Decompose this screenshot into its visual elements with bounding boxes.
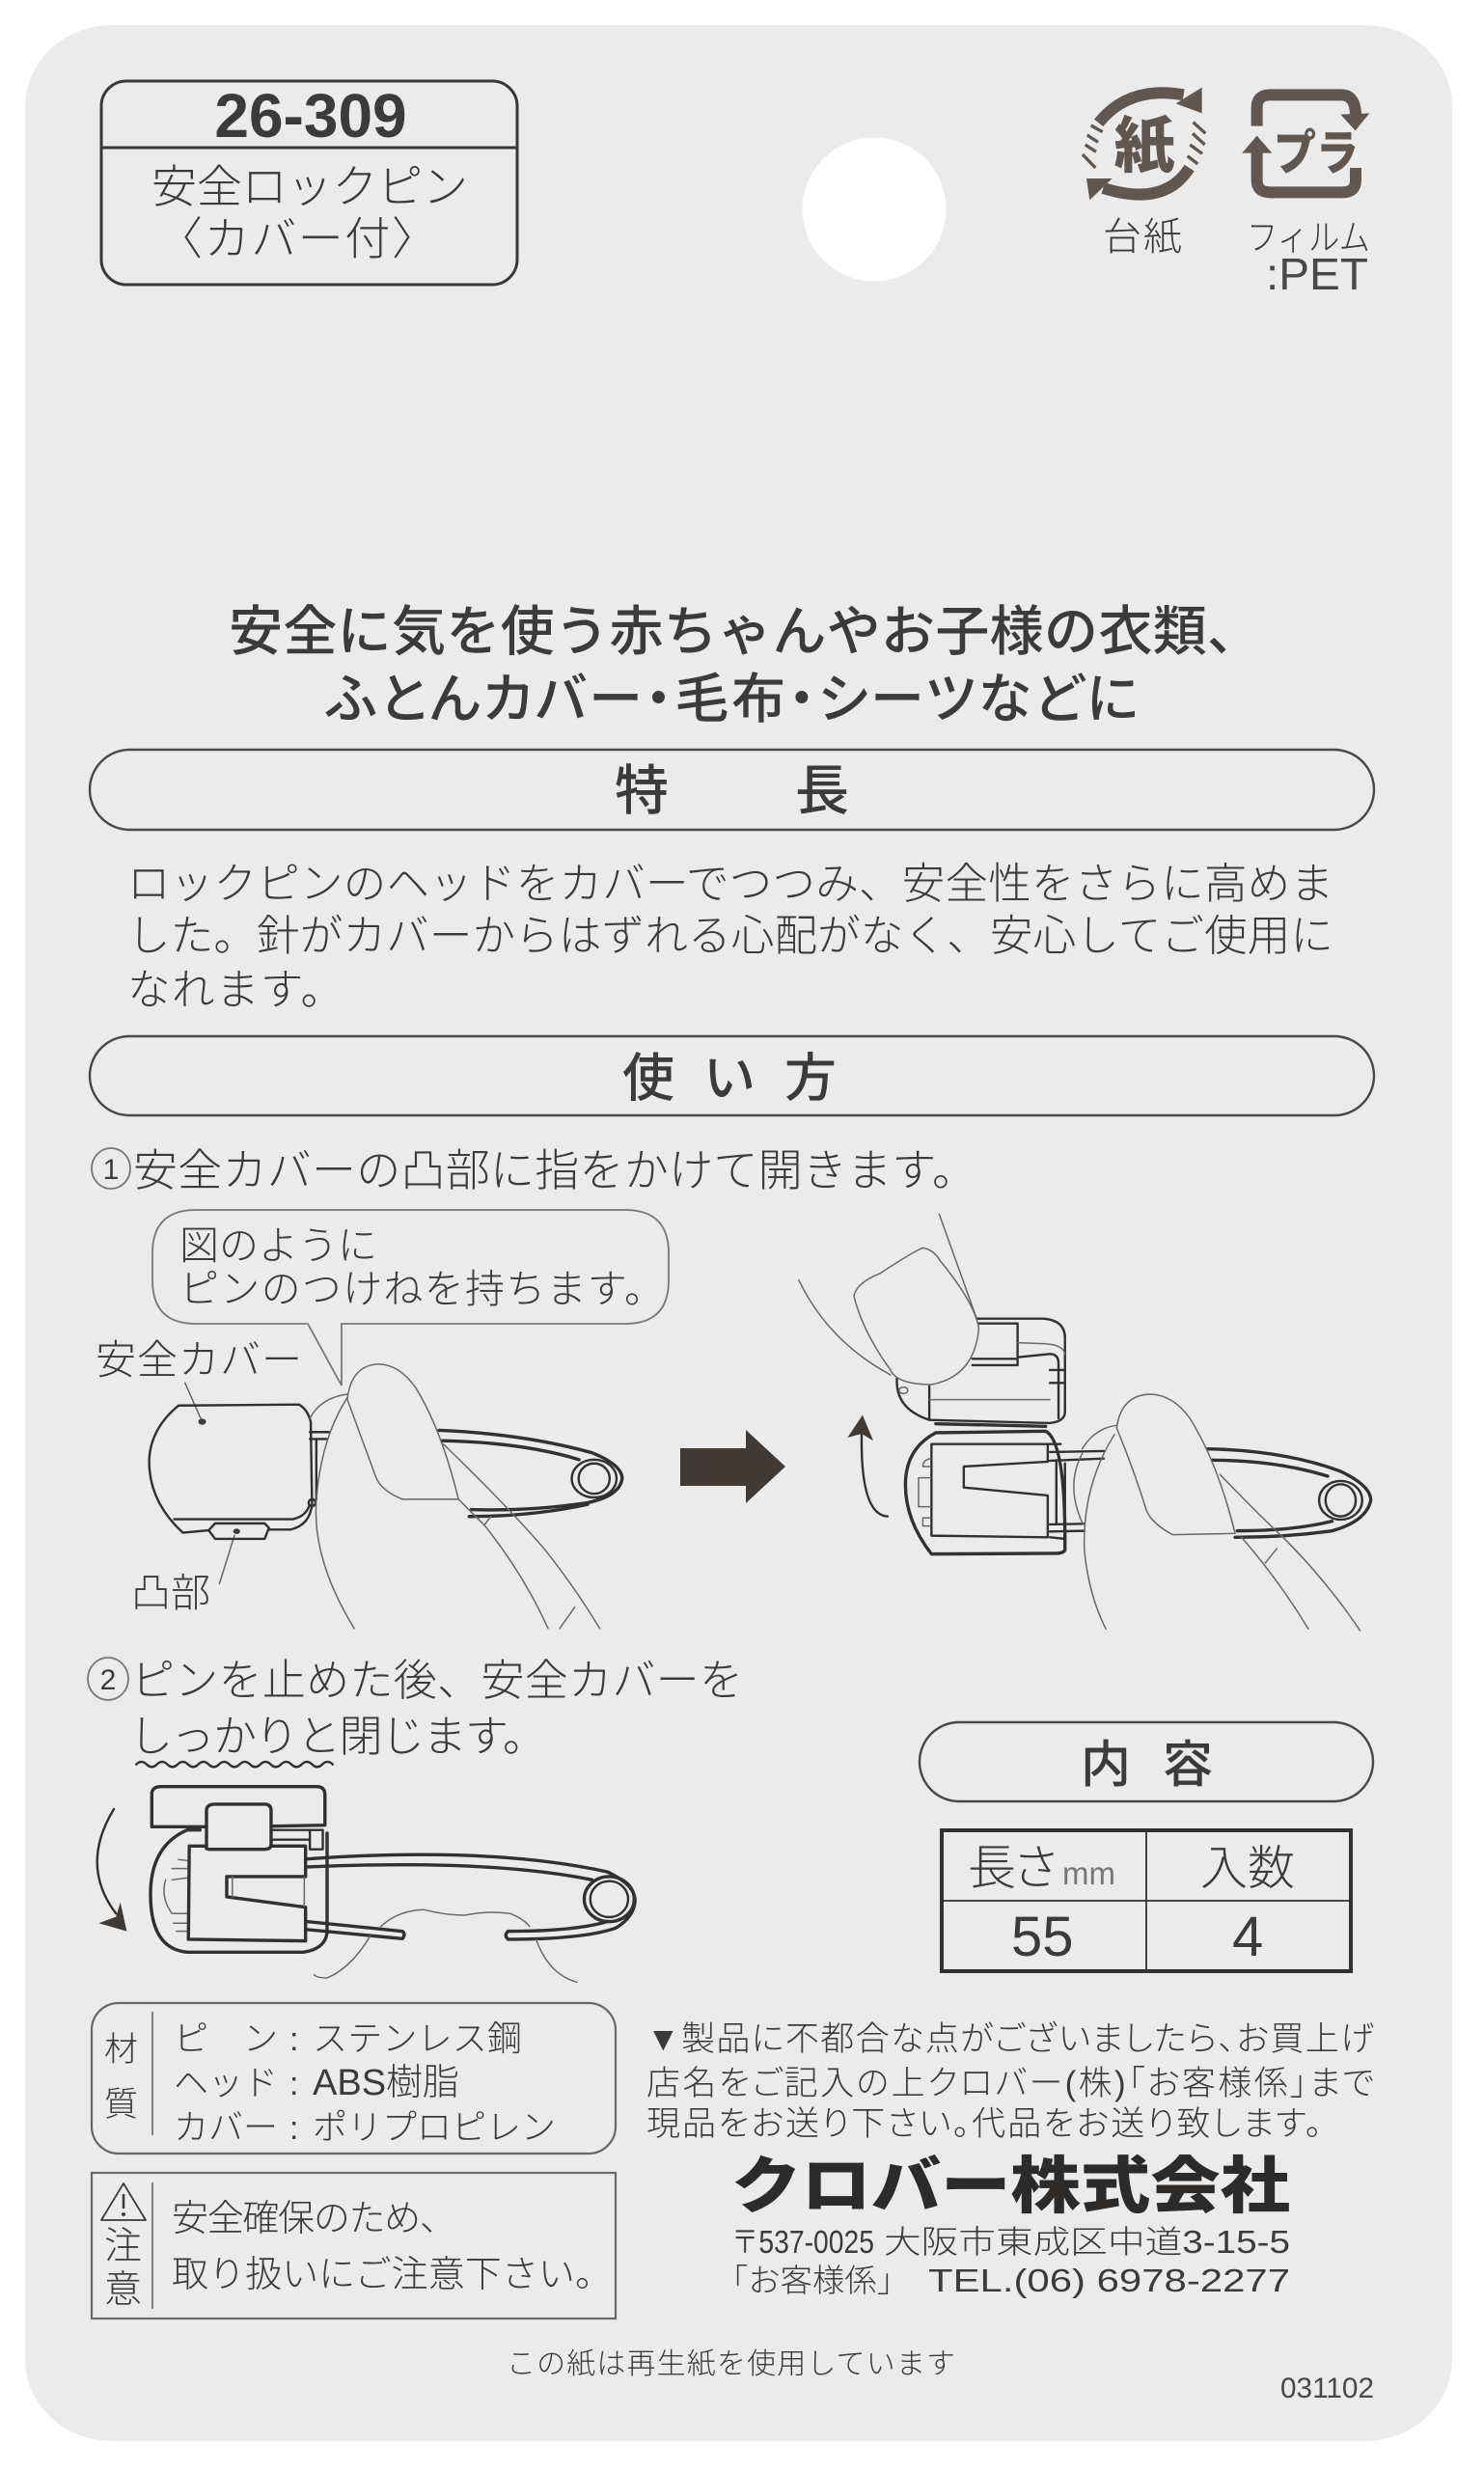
section heading: 使い方: 方 [784,1050,837,1108]
company address: 「お客様係」 [716,2263,909,2298]
contents table [942,1830,1351,1971]
headline: ふとんカバー・毛布・シーツなどに [325,669,1139,729]
company address: TEL.(06) 6978-2277 [928,2263,1290,2298]
contents table: mm [1062,1855,1115,1891]
contents table: 長さ [968,1841,1060,1895]
product number box [101,81,517,285]
icon: plastic recycling mark: フィルム [1247,218,1370,258]
callout: how to hold the pin [152,1210,669,1386]
features paragraph: した。針がカバーからはずれる心配がなく、安心してご使用に [127,913,1333,960]
illustration: holding the pin with the cover closed [150,1364,622,1629]
label: 凸部: 凸部 [131,1571,210,1615]
section heading: 使い方: い [703,1050,756,1108]
callout: how to hold the pin: ピンのつけねを持ちます。 [179,1267,664,1311]
callout: how to hold the pin: 図のように [179,1223,377,1268]
company address: 大阪市東成区中道3-15-5 [884,2224,1290,2260]
notice: defective product returns: ▼製品に不都合な点がございましたら、お買上げ [646,2020,1374,2058]
icon: plastic recycling mark: :PET [1266,249,1368,299]
panel: caution: 安全確保のため、 [172,2199,456,2239]
icon: plastic recycling mark: プラ [1274,126,1359,180]
features paragraph [127,861,1333,1014]
icon: paper recycling mark [1083,88,1205,259]
icon: paper recycling mark: 紙 [1113,113,1175,180]
headline: 安全に気を使う赤ちゃんやお子様の衣類、 [229,601,1261,662]
panel: materials: ABS樹脂 [313,2063,459,2103]
panel: materials: 材 [104,2031,138,2069]
notice: defective product returns: 現品をお送り下さい。代品をお送り致します。 [646,2105,1322,2143]
section heading: 内容 [920,1722,1373,1801]
recycled paper note: この紙は再生紙を使用しています [507,2348,955,2380]
panel: materials: ヘッド [174,2063,278,2102]
print code: 031102 [1280,2373,1374,2404]
company address: 〒537-0025 [731,2224,874,2260]
features paragraph: なれます。 [127,967,344,1014]
product number box: 〈カバー付〉 [157,213,437,264]
panel: caution: 取り扱いにご注意下さい。 [172,2255,612,2295]
section heading: 特長: 長 [795,760,849,821]
company address [716,2224,1290,2298]
step 1 instruction: 1 [103,1154,119,1186]
panel: materials: 質 [104,2086,138,2124]
section heading: 特長 [90,750,1374,830]
panel: materials: : [289,2110,298,2147]
contents table: 入数 [1200,1843,1295,1895]
panel: materials: ピ [174,2018,208,2058]
section heading: 使い方 [90,1036,1374,1115]
product number box: 26-309 [214,81,407,151]
company logo: クロバー株式会社 [731,2152,1290,2221]
product number box: 安全ロックピン [151,161,468,212]
illustration: closing the safety cover [97,1787,635,1982]
panel: materials: : [289,2066,298,2102]
notice: defective product returns: 店名をご記入の上クロバー(株)「お客様係」まで [646,2065,1374,2102]
step 2 instruction: ピンを止めた後、安全カバーを [131,1656,743,1705]
features paragraph: ロックピンのヘッドをカバーでつつみ、安全性をさらに高めま [127,861,1333,908]
contents table: 55 [1011,1906,1074,1968]
panel: materials [92,2003,616,2154]
panel: materials: カバー [174,2107,278,2147]
panel: materials: ステンレス鋼 [313,2018,522,2058]
step 1 instruction: 安全カバーの凸部に指をかけて開きます。 [133,1145,976,1195]
panel: caution: 注 [104,2226,142,2267]
icon: plastic recycling mark [1242,95,1370,299]
section heading: 特長: 特 [615,760,669,821]
step 2 instruction [88,1656,743,1767]
panel: caution: 意 [104,2269,142,2311]
arrow: next step [680,1430,785,1503]
panel: materials: ポリプロピレン [313,2107,556,2147]
step 2 instruction: 2 [100,1664,116,1696]
step 2 instruction: しっかりと閉じます。 [129,1712,546,1761]
icon: warning triangle [101,2183,146,2220]
contents table: 4 [1232,1906,1263,1968]
section heading: 内容: 容 [1163,1738,1213,1794]
section heading: 内容: 内 [1081,1738,1131,1794]
illustration: opening the safety cover [799,1214,1371,1631]
icon: paper recycling mark: 台紙 [1103,216,1182,259]
headline [229,601,1261,729]
label: 安全カバー: 安全カバー [96,1337,302,1383]
panel: materials: : [289,2021,298,2058]
section heading: 使い方: 使 [622,1050,674,1108]
panel: caution [92,2173,616,2319]
notice: defective product returns [646,2020,1374,2143]
panel: materials: ン [243,2018,278,2058]
